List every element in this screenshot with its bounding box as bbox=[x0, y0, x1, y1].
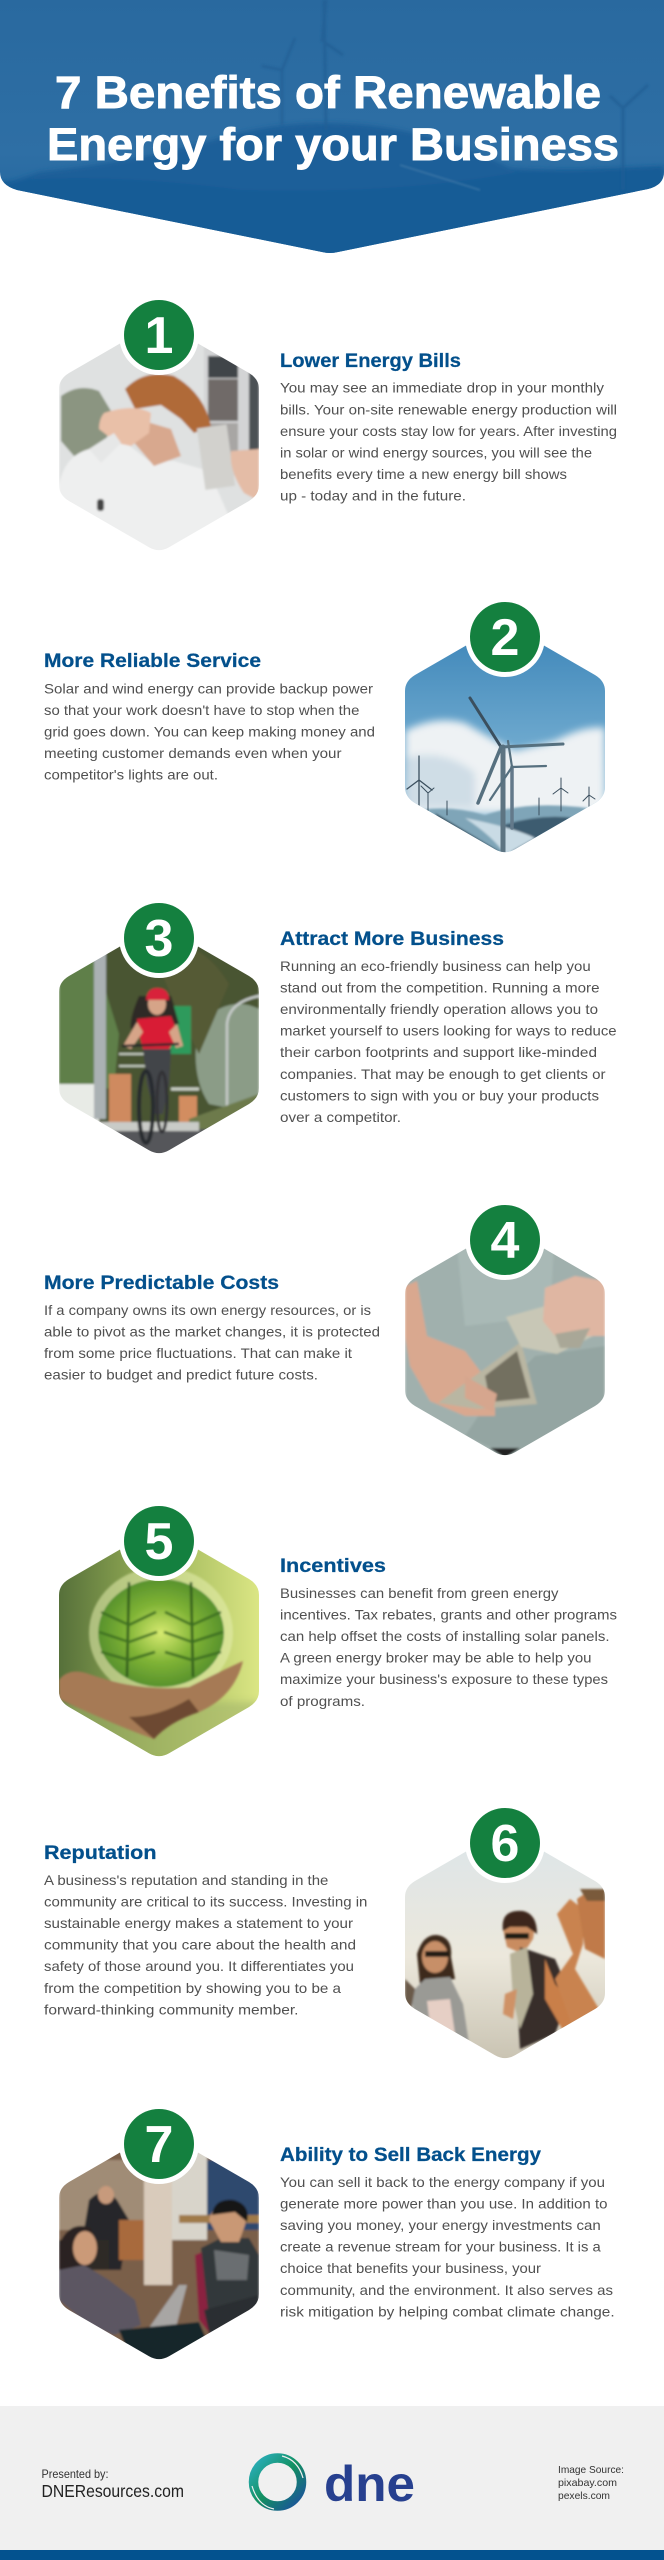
body text bbox=[280, 959, 617, 1125]
heading: Incentives bbox=[280, 1555, 386, 1577]
image source bbox=[558, 2464, 624, 2502]
body text: market yourself to users looking for ways to reduce bbox=[280, 1024, 617, 1039]
heading: Attract More Business bbox=[280, 928, 504, 950]
body text: environmentally friendly operation allows you to bbox=[280, 1002, 598, 1017]
panel: benefit 4 bbox=[44, 1200, 605, 1458]
body text: generate more power than you use. In addition to bbox=[280, 2197, 608, 2212]
panel: benefit 2 bbox=[44, 597, 605, 855]
header banner bbox=[0, 0, 664, 260]
panel: benefit 1 bbox=[59, 295, 617, 553]
photo: men talking in cafe bbox=[59, 2152, 259, 2360]
title bbox=[47, 67, 619, 170]
image source: pixabay.com bbox=[558, 2477, 617, 2489]
body text: benefits every time a new energy bill shows bbox=[280, 467, 567, 482]
heading: More Reliable Service bbox=[44, 650, 261, 672]
image source: Image Source: bbox=[558, 2464, 624, 2476]
panel: benefit 7 bbox=[59, 2104, 615, 2362]
body text: forward-thinking community member. bbox=[44, 2002, 298, 2017]
number badge 4 bbox=[465, 1200, 545, 1280]
photo: friends outdoors bbox=[405, 1852, 605, 2058]
presented by: Presented by: bbox=[42, 2467, 108, 2481]
body text: of programs. bbox=[280, 1694, 365, 1709]
body text: over a competitor. bbox=[280, 1110, 401, 1125]
number badge 4: 4 bbox=[491, 1212, 520, 1270]
body text bbox=[44, 1873, 367, 2017]
body text bbox=[280, 2175, 615, 2319]
body text: A business's reputation and standing in the bbox=[44, 1873, 328, 1888]
body text: A green energy broker may be able to help you bbox=[280, 1651, 592, 1666]
heading: More Predictable Costs bbox=[44, 1272, 279, 1294]
body text: can help offset the costs of installing solar panels. bbox=[280, 1629, 610, 1644]
body text: incentives. Tax rebates, grants and other programs bbox=[280, 1608, 617, 1623]
body text: saving you money, your energy investments can bbox=[280, 2218, 601, 2233]
footer bbox=[0, 2406, 664, 2560]
body text: Running an eco-friendly business can help you bbox=[280, 959, 591, 974]
panel: benefit 5 bbox=[59, 1501, 617, 1759]
body text: ensure your costs stay low for years. After investing bbox=[280, 424, 617, 439]
presented by bbox=[42, 2467, 184, 2501]
photo: cyclist delivery bbox=[59, 946, 259, 1154]
presented by: DNEResources.com bbox=[42, 2481, 184, 2501]
photo: hands counting money bbox=[405, 1248, 605, 1456]
body text: meeting customer demands even when your bbox=[44, 746, 342, 761]
hills bbox=[0, 123, 664, 260]
body text bbox=[44, 1303, 380, 1383]
panel: benefit 3 bbox=[59, 898, 617, 1156]
number badge 1 bbox=[119, 295, 199, 375]
body text: up - today and in the future. bbox=[280, 488, 466, 504]
number badge 7 bbox=[119, 2104, 199, 2184]
body text: safety of those around you. It differentiates you bbox=[44, 1959, 354, 1974]
title: 7 Benefits of Renewable bbox=[55, 67, 601, 118]
body text: sustainable energy makes a statement to your bbox=[44, 1916, 354, 1931]
body text: community that you care about the health and bbox=[44, 1938, 356, 1953]
panel: benefit 6 bbox=[44, 1803, 605, 2061]
body text bbox=[44, 682, 375, 783]
number badge 6 bbox=[465, 1803, 545, 1883]
body text: competitor's lights are out. bbox=[44, 768, 218, 783]
body text: grid goes down. You can keep making money and bbox=[44, 725, 375, 740]
body text: so that your work doesn't have to stop when the bbox=[44, 703, 359, 718]
body text: from some price fluctuations. That can make it bbox=[44, 1346, 352, 1361]
body text: easier to budget and predict future costs. bbox=[44, 1368, 318, 1383]
body text: If a company owns its own energy resources, or is bbox=[44, 1303, 371, 1318]
number badge 2 bbox=[465, 597, 545, 677]
body text: Businesses can benefit from green energy bbox=[280, 1586, 559, 1601]
number badge 5: 5 bbox=[145, 1513, 173, 1571]
number badge 6: 6 bbox=[491, 1815, 519, 1873]
wind turbines bbox=[262, 0, 648, 190]
logo wordmark: dne bbox=[324, 2456, 415, 2512]
body text: choice that benefits your business, your bbox=[280, 2261, 542, 2276]
body text: risk mitigation by helping combat climate change. bbox=[280, 2304, 615, 2319]
number badge 5 bbox=[119, 1501, 199, 1581]
photo: stressed woman with bill bbox=[59, 344, 259, 550]
image source: pexels.com bbox=[558, 2490, 610, 2502]
heading: Lower Energy Bills bbox=[280, 350, 461, 372]
number badge 1: 1 bbox=[145, 307, 173, 365]
body text: their carbon footprints and support like-minded bbox=[280, 1045, 597, 1060]
logo bbox=[252, 2456, 415, 2512]
body text: You can sell it back to the energy company if you bbox=[280, 2175, 605, 2190]
body text: community are critical to its success. Investing in bbox=[44, 1895, 367, 1910]
photo: wind turbines bbox=[405, 646, 605, 852]
heading: Ability to Sell Back Energy bbox=[280, 2144, 541, 2166]
body text bbox=[280, 381, 617, 504]
number badge 2: 2 bbox=[491, 609, 519, 667]
body text: in solar or wind energy sources, you will see the bbox=[280, 445, 592, 460]
body text: bills. Your on-site renewable energy production will bbox=[280, 402, 617, 417]
body text: create a revenue stream for your business. It is a bbox=[280, 2240, 601, 2255]
icon: ring bbox=[252, 2456, 303, 2509]
title: Energy for your Business bbox=[47, 119, 619, 170]
body text: Solar and wind energy can provide backup power bbox=[44, 682, 374, 696]
body text: from the competition by showing you to be a bbox=[44, 1981, 341, 1996]
heading: Reputation bbox=[44, 1842, 156, 1864]
body text: customers to sign with you or buy your products bbox=[280, 1088, 599, 1103]
number badge 3: 3 bbox=[145, 910, 173, 968]
body text: You may see an immediate drop in your monthly bbox=[280, 381, 604, 396]
photo: hand holding fern globe bbox=[59, 1550, 259, 1756]
number badge 3 bbox=[119, 898, 199, 978]
body text: companies. That may be enough to get clients or bbox=[280, 1067, 606, 1082]
body text: maximize your business's exposure to these types bbox=[280, 1672, 608, 1687]
body text: community, and the environment. It also serves as bbox=[280, 2283, 613, 2298]
body text: stand out from the competition. Running a more bbox=[280, 981, 600, 996]
number badge 7: 7 bbox=[145, 2116, 173, 2174]
body text: able to pivot as the market changes, it is protected bbox=[44, 1325, 380, 1340]
body text bbox=[280, 1586, 617, 1709]
